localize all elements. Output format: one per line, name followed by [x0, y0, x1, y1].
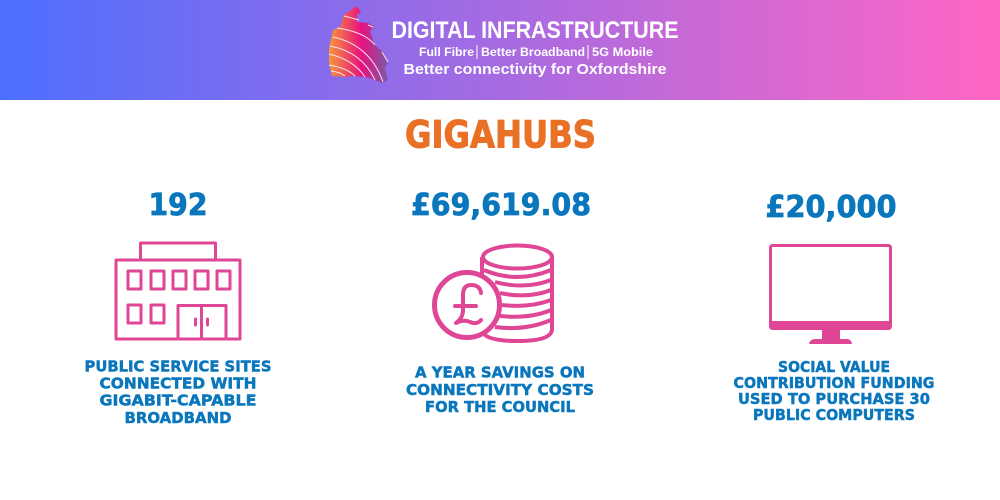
- caption: FOR THE COUNCIL: [425, 398, 575, 416]
- caption: PUBLIC SERVICE SITES: [84, 358, 272, 376]
- stat number: 192: 192: [148, 188, 208, 223]
- icon: building: [116, 243, 240, 339]
- caption: SOCIAL VALUE: [778, 358, 890, 376]
- stat number: £69,619.08: £69,619.08: [411, 188, 591, 223]
- caption: A YEAR SAVINGS ON: [415, 364, 585, 382]
- caption: CONNECTED WITH: [100, 374, 256, 392]
- icon: pound coins: [434, 246, 552, 341]
- header subtitle: [419, 45, 653, 59]
- caption: CONTRIBUTION FUNDING: [734, 374, 934, 392]
- icon: monitor: [770, 246, 891, 344]
- caption: [84, 358, 272, 427]
- header subtitle: 5G Mobile: [592, 45, 653, 59]
- main heading: GIGAHUBS: [405, 114, 596, 156]
- header title: DIGITAL INFRASTRUCTURE: [392, 17, 678, 44]
- caption: USED TO PURCHASE 30: [738, 390, 930, 408]
- header subtitle: Full Fibre: [419, 45, 474, 59]
- caption: CONNECTIVITY COSTS: [406, 381, 594, 399]
- column: public service sites: [84, 188, 272, 427]
- header tagline: Better connectivity for Oxfordshire: [404, 61, 666, 78]
- column: savings: [406, 188, 594, 416]
- caption: PUBLIC COMPUTERS: [753, 406, 915, 424]
- column: social value: [734, 190, 934, 424]
- stat number: £20,000: £20,000: [766, 190, 896, 225]
- header banner: [0, 0, 1000, 100]
- header subtitle: Better Broadband: [481, 45, 585, 59]
- caption: BROADBAND: [124, 409, 232, 427]
- icon: Oxfordshire map with signal arcs: [329, 6, 388, 83]
- caption: [734, 358, 934, 424]
- caption: [406, 364, 594, 416]
- caption: GIGABIT-CAPABLE: [100, 392, 256, 410]
